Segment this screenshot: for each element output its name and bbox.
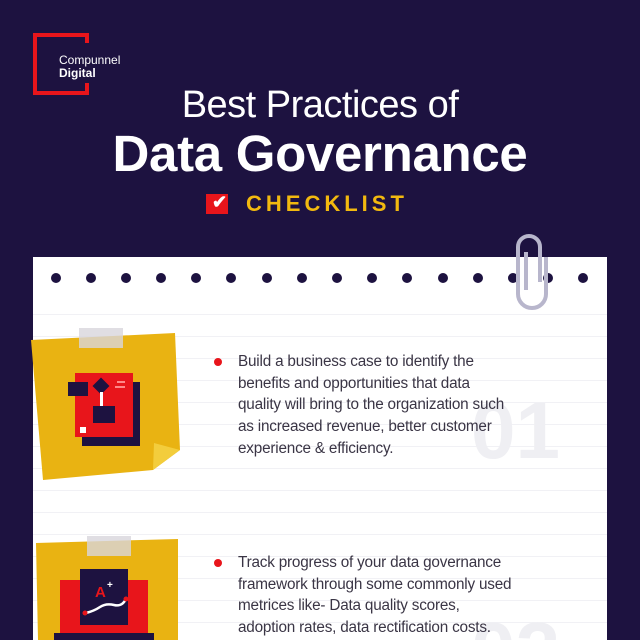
title: Best Practices of — [182, 84, 458, 126]
binder holes — [33, 257, 607, 297]
text 2 — [214, 554, 511, 636]
text 1: experience & efficiency. — [238, 440, 393, 457]
sticky note 2: + — [107, 580, 113, 591]
text 1 — [214, 353, 504, 457]
checklist label: CHECKLIST — [246, 191, 408, 216]
checklist label: ✔ — [212, 192, 227, 212]
text 2: Track progress of your data governance — [238, 554, 501, 571]
text 1: as increased revenue, better customer — [238, 418, 492, 435]
text 2: metrices like- Data quality scores, — [238, 597, 460, 614]
sticky note 1 — [31, 328, 180, 480]
big number 01: 01 — [471, 386, 560, 475]
title: Data Governance — [112, 125, 528, 182]
sticky note 2 — [36, 536, 178, 640]
paperclip — [516, 234, 548, 310]
text 1: quality will bring to the organization such — [238, 396, 504, 413]
text 1: Build a business case to identify the — [238, 353, 474, 370]
title — [112, 84, 528, 182]
text 2: adoption rates, data rectification costs. — [238, 619, 491, 636]
text 2: framework through some commonly used — [238, 576, 511, 593]
text 1: benefits and opportunities that data — [238, 375, 470, 392]
logo: Digital — [59, 66, 96, 80]
sticky note 2: A — [95, 584, 106, 601]
logo: Compunnel — [59, 53, 120, 67]
paper — [33, 257, 607, 640]
logo — [33, 33, 120, 95]
